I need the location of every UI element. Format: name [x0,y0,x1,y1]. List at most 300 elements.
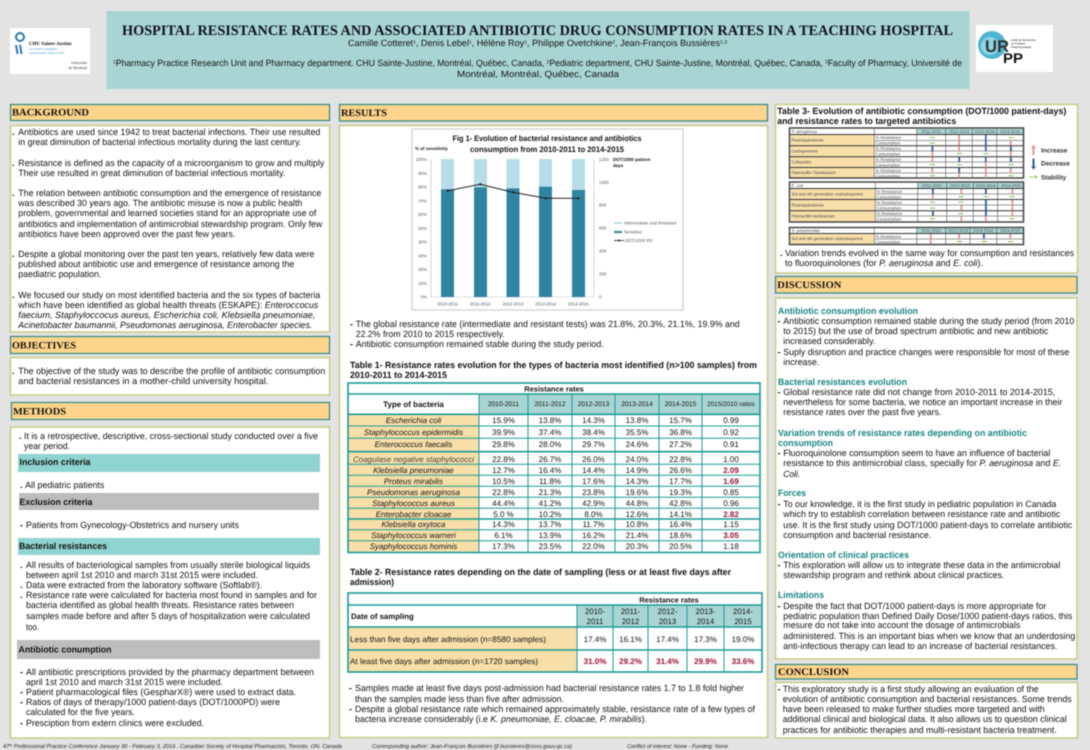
table 3a: P. aeruginosa: Consumption [876,152,901,156]
table 3a: P. aeruginosa: Consumption [876,174,901,178]
band: bacterial resistances [18,538,320,555]
subsection: limitations: mesure do not take into account the dosage of antimicrobials [783,620,1021,630]
table 2 row: less than five days: 16.1% [619,635,642,644]
table 1 title: 2010-2011 to 2014-2015 [350,370,447,380]
table 3b: E. coli: % Resistance [876,211,903,216]
table 1 values: 20.3% [626,542,648,551]
table 3 legend: Increase [1041,148,1068,154]
table 3a: P. aeruginosa: % Resistance [876,135,902,140]
authors: , Jean-François Bussières [615,38,720,48]
subsection: antibiotic consumption evolution: Antibiotic consumption evolution [778,306,918,316]
subsection: orientation of clinical practices: Orientation of clinical practices [778,550,909,560]
table 1 values: 10.2% [539,510,561,519]
table 3a: P. aeruginosa: % Resistance [876,168,902,173]
logo: CHU Sainte-Justine: Le centre hospitalier [29,47,59,51]
subsection: limitations: Despite the fact that DOT/1000 patient-days is more appropriate for [783,601,1046,611]
subsection: bacterial resistances evolution: nevertheless for some bacteria, we notice an important increase in their [783,397,1062,407]
table 1 values: 23.5% [539,542,561,551]
chart: bacterial resistance and antibiotic consumption: % of sensitivity [415,146,448,151]
panel: background: . [12,249,15,259]
table 2 header [351,596,753,626]
subsection: forces: consumption and bacterial resistance. [783,530,931,540]
table 3a: P. aeruginosa: 2013-2014 [974,129,995,134]
results text: - [350,319,353,329]
table 1 values: 29.7% [582,440,605,449]
panel: background: Resistance is defined as the capacity of a microorganism to grow and multiply [18,158,325,168]
subsection: forces [778,488,1073,540]
logo: URPP [976,25,1053,72]
table 3c: S. pneumoniae: 2013-2014 [973,228,994,233]
table 1 values: 2.82 [723,510,739,519]
x axis labels: 2010-2011 [437,302,459,306]
left axis: 90% [418,171,427,176]
heading: objectives [10,336,330,354]
table 1 values: 3.05 [723,531,739,540]
panel: table 3 [776,104,1078,273]
table 2 header: Resistance rates [639,596,699,604]
table 1 values: 13.8% [626,416,648,425]
stacked bars [441,159,585,297]
panel: objectives: The objective of the study was to describe the profile of antibiotic consumption [18,366,325,376]
exclusion text: Patients from Gynecology-Obstetrics and nursery units [26,520,239,530]
table 3c: S. pneumoniae: Consumption [876,240,901,244]
left axis: 10% [418,281,427,286]
table 1 header [383,384,755,409]
results closing text: than the samples made less than five after admission. [355,694,564,704]
subsection: antibiotic consumption evolution: increased considerably. [783,336,875,346]
panel: background [10,126,330,332]
right axis: 1200 [599,157,609,162]
subsection: limitations: Limitations [778,590,824,600]
table 1 values: 16.2% [582,531,605,540]
table 3b: E. coli: Piperacillin-tazobactam [792,214,835,218]
table 1 values: 42.9% [582,499,605,508]
panel: background: was described 30 years ago. The antibiotic misuse is now a public health [17,198,302,208]
subsection: limitations: - [778,601,780,611]
table 1 values: 0.96 [723,499,739,508]
subsection: variation trends: Fluoroquinolone consumption seem to have an influence of bacterial [783,448,1050,458]
logo: URPP: en Pratique [1011,42,1026,46]
icon: stability arrow [1029,175,1038,179]
table 1 values: 0.99 [723,416,739,425]
panel: background: which have been identified as global health threats (ESKAPE): Enteroccocus [17,300,319,310]
results text: 22.2% from 2010 to 2015 respectively. [356,329,505,339]
logo: URPP: Unité de Recherche [1011,38,1036,42]
logo: URPP: UR [985,37,1009,56]
panel: background: We focused our study on most identified bacteria and the six types of bacteria [18,290,320,300]
table 3 note: Variation trends evolved in the same way for consumption and resistances [785,248,1074,258]
panel: objectives: and bacterial resistances in a mother-child university hospital. [18,376,268,386]
panel: background: paediatric population. [18,269,101,279]
left axis: 30% [418,253,427,258]
table 3b: E. coli: 2013-2014 [975,183,996,188]
table 1 values: 39.9% [492,428,515,437]
exclusion text: - [20,520,23,530]
table 3b: E. coli: Consumption [876,206,902,210]
right axis: 0 [599,294,602,300]
footer: conference: th [9,744,12,748]
table 3c: S. pneumoniae: 2011-2012 [921,228,942,233]
table 2 row: at least five days: At least five days after admission (n=1720 samples) [350,657,538,666]
x axis labels: 2014-2015 [568,302,589,306]
panel: results [340,126,768,738]
table 1 values: 37.4% [539,428,561,437]
subsection: forces: which try to establish correlation between resistance rate and antibiotic [782,509,1061,519]
table 3a: P. aeruginosa: % Resistance [876,146,902,151]
table 1 values: 22.8% [492,488,515,497]
authors: , Philippe Ovetchkine [527,38,612,48]
table 1 header: 2015/2010 ratios [707,401,755,408]
left axis: 100% [416,157,427,162]
right axis [594,157,652,300]
affiliations: Faculty of Pharmacy, Université de [828,58,962,68]
bacterial resistances text: Data were extracted from the laboratory software (Softlab®). [26,580,262,590]
heading: discussion [776,276,1077,293]
table 3b: E. coli: Consumption [876,194,902,200]
table 2 row: less than five days: 17.3% [694,635,717,644]
table 3 title: and resistance rates to targeted antibiotics [777,116,956,126]
subsection: variation trends: Variation trends of resistance rates depending on antibiotic [778,428,1027,438]
logo: URPP: PP [1003,50,1023,66]
panel: background: . [12,127,15,137]
table 1 values: 5.0 % [493,510,514,519]
table 2 header: 2010- [585,607,605,616]
right axis: 1000 [599,180,609,185]
study design text: year period. [24,441,70,451]
table 1 values: 2.09 [723,466,739,475]
table 1 values: 18.6% [669,531,692,540]
subsection: forces: To our knowledge, it is the first study in pediatric population in Canada [783,499,1056,509]
legend: Sensitive [624,230,642,234]
table 3a: P. aeruginosa: 2014-2015 [1000,129,1021,134]
results text [350,319,740,349]
antibiotic consumption text: Patient pharmacological files (GespharX®) were used to extract data. [26,687,296,697]
bacterial resistances text: bacteria identified as global health threats. Resistance rates between [26,600,294,610]
table 1 bacteria names: Staphylococcus aureus [372,499,455,508]
panel: background: problem, governmental and learned societies stand for an appropriate use of [18,208,317,218]
table 1 values: 20.5% [669,542,692,551]
study design text [19,431,318,451]
footer: conflict of interest: Conflict of interest: None - Funding: None [627,743,728,750]
antibiotic consumption text: Ratios of days of therapy/1000 patient-days (DOT/1000PD) were [26,697,280,707]
authors: Camille Cotteret [348,38,413,48]
table 3b: E. coli: 2011-2012 [922,183,943,188]
table 1 values: 13.8% [539,416,561,425]
band: antibiotic consumption [17,640,320,659]
results text: Antibiotic consumption remained stable during the study period. [356,339,604,349]
legend [614,220,677,243]
table 1 values: 44.8% [626,499,648,508]
panel: background: Acinetobacter baumannii, Pseudomonas aeruginosa, Enterobacter species. [17,320,312,330]
table 1 values: 24.6% [626,440,648,449]
table 2 header: 2011 [587,617,603,626]
table 1 values: 38.4% [582,428,605,437]
panel: background: faecium, Staphyloccocus aureus, Escherichia coli, Klebsiella pneumoniae, [18,310,315,320]
table 1 values: 27.2% [669,440,692,449]
right axis: 200 [599,271,607,276]
bacterial resistances text [20,560,317,632]
table 1 values: 12.6% [626,510,648,519]
table 1 values: 29.8% [492,440,515,449]
authors: 1 [413,40,416,46]
table 1 bacteria names: Enterococcus faecalis [375,440,452,449]
table 1 values: 12.7% [492,466,515,475]
x axis labels: 2012-2013 [502,302,524,306]
subsection: variation trends: resistance to this antimicrobial class, specially for P. aeruginosa and E. [783,458,1061,468]
left axis: 40% [418,240,427,244]
table 1 bacteria names: Staphylococcus epidermidis [364,428,463,437]
heading: background [10,104,330,120]
table 1 values: 14.9% [626,466,648,475]
antibiotic consumption text: All antibiotic prescriptions provided by the pharmacy department between [26,667,314,677]
subsection: orientation of clinical practices: - [778,560,780,570]
panel: background: published about antibiotic use and emergence of resistance among the [18,259,294,269]
table 2 row: less than five days: 19.0% [732,635,754,644]
subsection: antibiotic consumption evolution: Suply disruption and practice changes were responsible for most of these [783,347,1069,357]
table 1 bacteria names: Enterobacter cloacae [376,510,452,519]
right axis: 600 [599,226,607,231]
panel: methods [10,427,330,738]
table 2 [348,593,762,672]
affiliations: 1 [113,60,116,66]
table 3 note: to fluoroquinolones (for P. aeruginosa and E. coli). [785,258,983,268]
table 2 header: Date of sampling [351,612,414,621]
logo: CHU Sainte-Justine: Université [71,61,87,65]
table 1 values: 14.3% [626,477,648,486]
subsection: antibiotic consumption evolution: Antibiotic consumption remained stable during the study period (from 2010 [783,316,1074,326]
subsection: bacterial resistances evolution [778,377,1062,417]
table 1 values: 23.8% [582,488,605,497]
table 2 row: at least five days [350,657,754,666]
authors: , Hélène Roy [472,38,525,48]
table 1 bacteria names: Coagulase negative staphylococci [353,455,474,464]
results closing text: Samples made at least five days post-admission had bacterial resistance rates 1.7 to 1.8 fold higher [355,683,744,693]
table 2 header: 2013- [696,607,716,616]
table 2 row: less than five days: 17.4% [584,635,606,644]
subsection: forces: - [778,499,780,509]
bacterial resistances text: too. [26,622,39,632]
results closing text [349,683,755,724]
panel: background: . [12,290,15,300]
table 1 values: 21.3% [539,488,561,497]
panel: background: in great diminution of bacterial infectious mortality during the last century. [18,137,301,147]
table 1 values: 11.8% [539,477,561,486]
heading: results [340,104,768,121]
table 3b: E. coli: E. coli [792,183,804,188]
table 3 title: Table 3- Evolution of antibiotic consumption (DOT/1000 patient-days) [777,106,1066,116]
heading: background: BACKGROUND [12,108,89,118]
subsection: antibiotic consumption evolution: increase. [783,357,819,367]
chart: bacterial resistance and antibiotic consumption [412,129,683,310]
table 3 legend: Decrease [1041,160,1070,168]
authors: , Denis Lebel [416,38,469,48]
header banner: Montréal, Montréal, Québec, Canada [457,69,619,79]
table 1 values: 15.9% [492,416,515,425]
legend: DOT/1000 PD [625,238,653,243]
panel: background: Despite a global monitoring over the past ten years, relatively few data were [18,249,314,259]
table 3a: P. aeruginosa: Fluoroquinolones [792,138,824,142]
table 1 values: 42.8% [669,499,692,508]
table 1 bacteria names: Pseudomonas aeruginosa [367,488,461,497]
table 1 values: 0.91 [723,440,739,449]
left axis: 60% [418,212,427,217]
table 3b: E. coli: Consumption [876,216,902,222]
table 3a: P. aeruginosa: P. aeruginosa [792,129,817,134]
table 1 header: 2014-2015 [665,401,697,408]
footer: corresponding author: Corresponding author: Jean-François Bussières (jf.bussieres@ssss.gouv.qc.ca) [372,743,572,750]
table 2 header: 2011- [621,607,641,616]
left axis: 80% [418,184,427,190]
DOT line [446,183,580,200]
table 3a: P. aeruginosa: Carbapenems [792,148,818,154]
arrows [930,135,1014,178]
table 2 row: at least five days: 33.6% [732,657,754,666]
table 1 [348,383,760,552]
table 1 values: 17.3% [492,542,515,551]
antibiotic consumption text: - [20,718,23,728]
logo: CHU Sainte-Justine [10,28,90,74]
right axis: DOT/1000 patient- [613,157,652,162]
subsection: forces: Forces [778,488,806,498]
subsection: variation trends: Coli. [783,469,800,479]
band: antibiotic consumption: Antibiotic conumption [18,644,112,654]
affiliations: Pediatric department, CHU Sainte-Justine, Montréal, Québec, Canada, [549,58,825,68]
table 2 header: 2014- [733,607,753,616]
table 3a: P. aeruginosa: % Resistance [876,157,902,162]
subsection: bacterial resistances evolution: resistance rates over the past five years. [783,407,941,417]
affiliations: 2 [547,60,550,66]
band: inclusion criteria: Inclusion criteria [20,457,91,467]
left axis: 0% [421,294,427,300]
logo: CHU Sainte-Justine: de Montréal [69,66,87,70]
table 1 values: 1.15 [723,520,739,529]
table 1 values: 26.7% [539,455,561,464]
antibiotic consumption text: april 1st 2010 and march 31st 2015 were included. [26,677,223,687]
results closing text: Despite a global resistance rate which remained approximately stable, resistance rate of a few types of [355,704,755,714]
antibiotic consumption text: - [20,697,23,707]
panel: discussion [776,298,1077,659]
panel: background: antibiotics and implementation of antimicrobial stewardship program. Only few [18,219,323,229]
subsection: bacterial resistances evolution: Global resistance rate did not change from 2010-2011 to 2014-2015, [783,387,1055,397]
table 3a: P. aeruginosa: Consumption [876,162,901,168]
antibiotic consumption text [20,667,314,728]
icon: increase arrow [1031,145,1036,155]
subsection: bacterial resistances evolution: Bacterial resistances evolution [778,377,907,387]
subsection: antibiotic consumption evolution: - [778,347,780,357]
panel: conclusion: evolution of antibiotic consumption and bacterial resistances. Some trends [783,694,1072,704]
subsection: limitations: pediatric population than Defined Daily Dose/1000 patient-days ratios, this [783,611,1073,621]
table 1 values: 1.00 [723,455,739,464]
table 1 header: 2010-2011 [488,401,519,408]
table 1 values: 17.7% [669,477,692,486]
subsection: forces: use. It is the first study using DOT/1000 patient-days to correlate antibiotic [783,520,1073,530]
table 2 header: 2015 [734,617,752,626]
table 1 bacteria names: Klebsiella oxytoca [381,520,446,529]
x axis labels: 2013-2014 [535,302,557,306]
arrows [930,189,1014,222]
band: inclusion criteria [18,454,320,472]
table 3 note: . [780,248,783,258]
panel: conclusion: additional clinical and biological data. It also allows us to question clinical [783,714,1067,724]
table 3a: P. aeruginosa: 2011-2012 [921,129,942,134]
table 3 legend [1029,145,1070,182]
panel: objectives [10,358,330,395]
chart title: Fig 1- Evolution of bacterial resistance and antibiotics [452,134,642,143]
table 3c: S. pneumoniae: 3rd and 4th generation cephalosporins [792,236,863,241]
table 3b: E. coli: 2014-2015 [1001,183,1022,188]
antibiotic consumption text: calculated for the five years. [26,707,135,717]
panel: conclusion: have been released to make further studies more targeted and with [783,704,1045,714]
table 1 values: 44.4% [492,499,515,508]
table 3b: E. coli: Fluoroquinolones [792,202,824,208]
authors: 1 [524,40,527,46]
table 1 header: Type of bacteria [383,400,444,409]
table 1 values: 13.9% [539,531,561,540]
table 2 row: less than five days: 17.4% [656,635,679,644]
table 1 values: 1.18 [723,542,739,551]
authors: 1,3 [720,40,727,46]
table 2 header: 2014 [697,617,715,626]
panel: conclusion: practices for antibiotic therapies and multi-resistant bacteria treatment. [783,725,1057,735]
table 3a: P. aeruginosa: Consumption [876,140,901,146]
bacterial resistances text: between april 1st 2010 and march 31st 2015 were included. [26,570,258,580]
table 1 values: 24.0% [626,455,648,464]
bacterial resistances text: All results of bacteriological samples from usually sterile biological liquids [26,560,310,570]
table 3b: E. coli: 2012-2013 [950,183,971,188]
heading: methods [12,402,330,420]
table 3b: E. coli: % Resistance [876,200,903,205]
results closing text: - [349,683,352,693]
table 1 values: 15.7% [669,416,692,425]
panel: conclusion: - [778,684,780,694]
results closing text: - [349,704,352,714]
logo: CHU Sainte-Justine: CHU Sainte-Justine [29,41,72,47]
table 3c: S. pneumoniae [790,228,1024,244]
affiliations: Pharmacy Practice Research Unit and Pharmacy department. CHU Sainte-Justine, Montréal, Québec, Canada, [116,58,547,68]
heading: methods: METHODS [13,406,66,418]
antibiotic consumption text: - [20,667,23,677]
table 1 bacteria names: Escherichia coli [386,416,442,425]
table 3c: S. pneumoniae: S. pneumoniae [792,228,820,233]
logo: CHU Sainte-Justine: universitaire mère-enfant [29,51,64,55]
footer: conference: 47 [3,744,9,750]
heading: conclusion: CONCLUSION [778,667,850,678]
table 3a: P. aeruginosa: Piperacillin-Tazobactam [792,170,836,175]
table 1 values: 14.3% [492,520,515,529]
table 1 values: 22.0% [582,542,605,551]
inclusion text: All pediatric patients [25,480,105,490]
subsection: antibiotic consumption evolution: to 2015) but the use of broad spectrum antibiotic and new antibiotic [783,326,1049,336]
legend: Intermediate and Resistant [624,220,677,226]
table 1 values: 35.5% [626,428,648,437]
left axis: 20% [418,267,427,272]
table 1 values: 16.4% [539,466,561,475]
panel: objectives: . [12,366,15,376]
table 3c: S. pneumoniae: % Resistance [876,234,902,239]
table 1 values: 10.5% [492,477,515,486]
table 1 values: 19.3% [669,488,692,497]
left axis: 70% [418,198,427,203]
right axis: 800 [599,203,607,208]
subsection: orientation of clinical practices: This exploration will allow us to integrate these data in the antimicrobial [783,560,1060,570]
table 2 title: admission) [350,577,394,587]
table 1 values: 22.8% [669,455,692,464]
table 3 title [777,106,1066,126]
arrows [930,234,1013,244]
subsection: limitations: anti-infectious therapy can lead to an increase of bacterial resistances. [783,641,1057,651]
panel: background: Their use resulted in great diminution of bacterial infectious mortality. [18,168,285,178]
table 1 values: 26.0% [582,455,605,464]
